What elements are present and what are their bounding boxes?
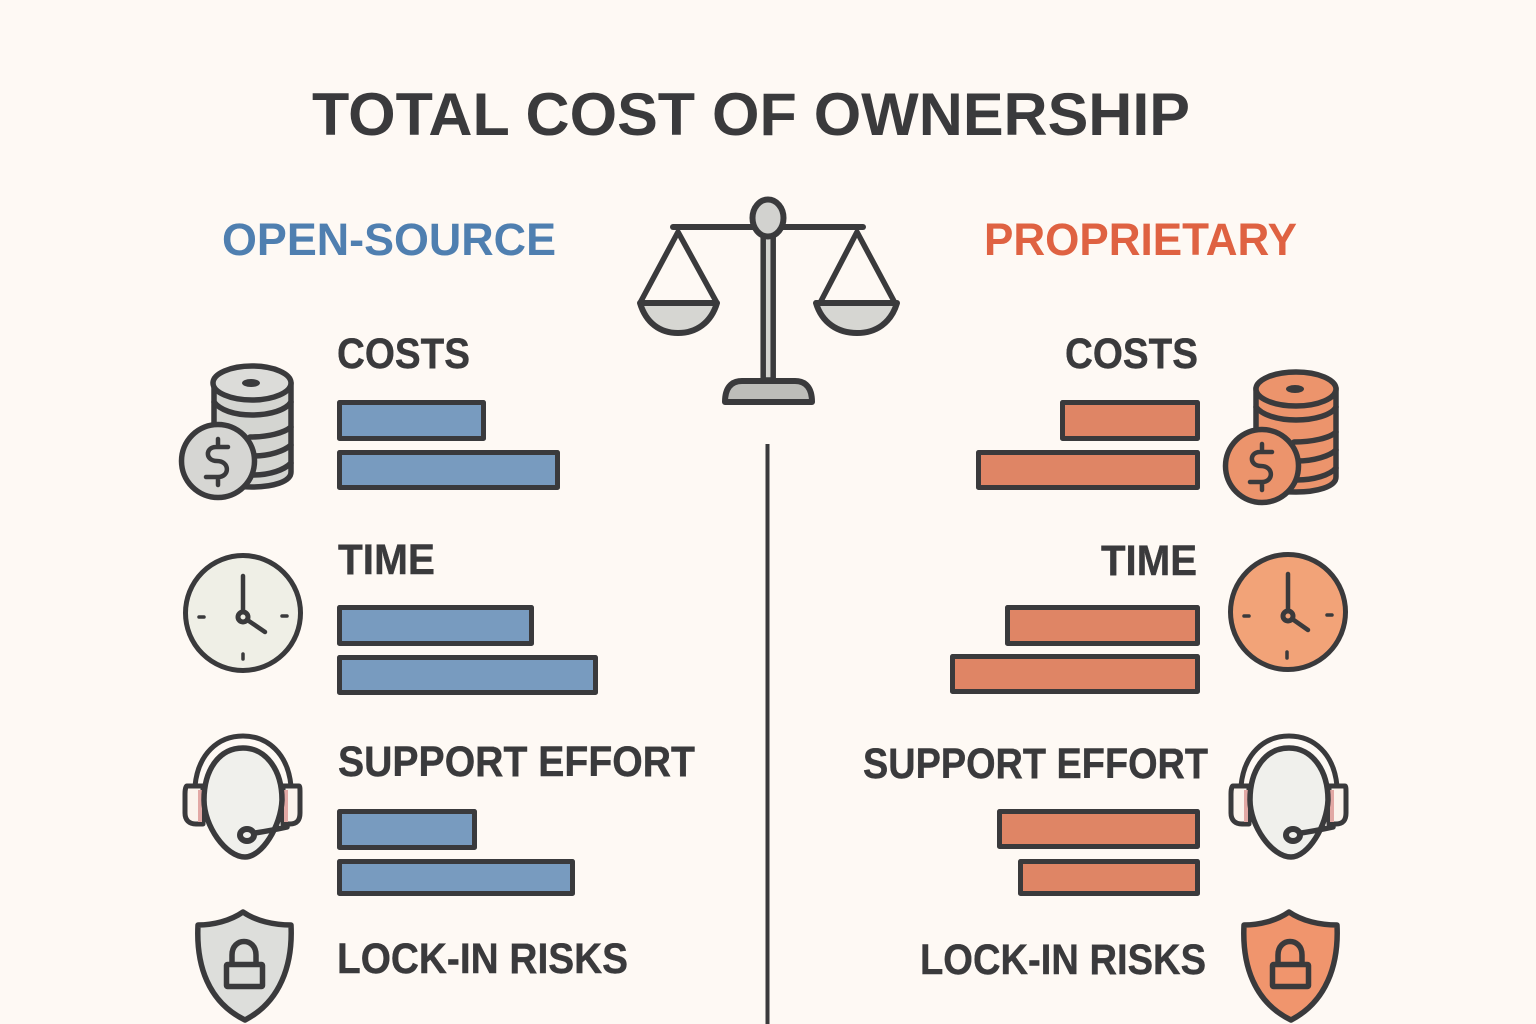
bars: costs — [978, 402, 1198, 488]
bars: support effort — [340, 812, 572, 894]
icon: clock — [1230, 554, 1346, 670]
bars: support effort — [1000, 812, 1198, 894]
label: time: TIME — [1101, 537, 1197, 585]
bars: costs — [340, 402, 558, 488]
panel: proprietary — [863, 214, 1346, 1020]
center divider line — [766, 444, 770, 1024]
icon: shield lock — [198, 912, 291, 1020]
label: lock-in risks: LOCK-IN RISKS — [337, 935, 628, 983]
title: TOTAL COST OF OWNERSHIP — [312, 81, 1190, 148]
label: time: TIME — [338, 536, 435, 584]
bars: time — [340, 608, 596, 692]
icon: clock — [186, 556, 300, 670]
panel: open-source — [182, 214, 695, 1020]
icon: balance scale — [640, 200, 897, 402]
label: support effort: SUPPORT EFFORT — [338, 738, 695, 786]
icon: headset — [1231, 736, 1346, 857]
label: costs: COSTS — [337, 330, 470, 378]
label: costs: COSTS — [1065, 330, 1198, 378]
bars: time — [952, 608, 1198, 692]
label: support effort: SUPPORT EFFORT — [863, 740, 1208, 788]
heading: open-source: OPEN-SOURCE — [222, 214, 556, 265]
icon: coin stack — [1226, 372, 1336, 502]
icon: coin stack — [182, 366, 291, 498]
heading: proprietary: PROPRIETARY — [984, 214, 1297, 265]
label: lock-in risks: LOCK-IN RISKS — [920, 936, 1206, 984]
icon: headset — [185, 736, 300, 857]
icon: shield lock — [1244, 912, 1337, 1020]
